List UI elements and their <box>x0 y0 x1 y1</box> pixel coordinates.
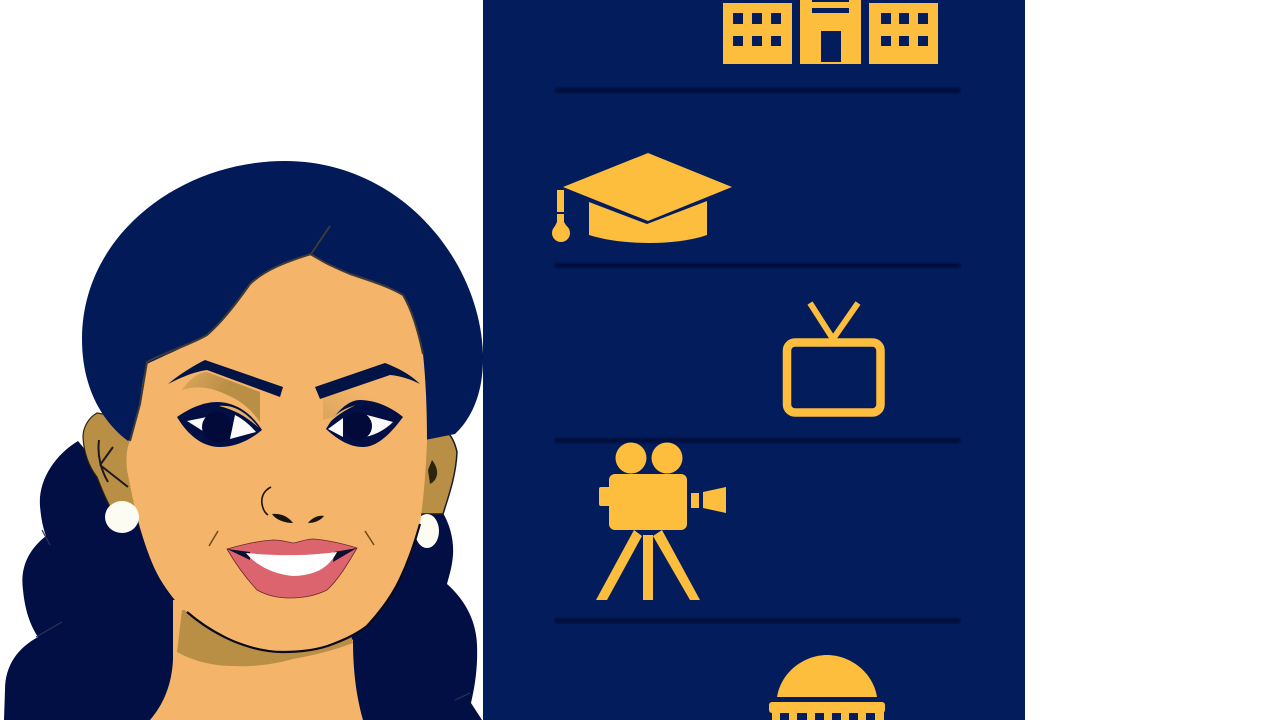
panel: navy icon column <box>483 0 1025 720</box>
mouth corners <box>227 548 357 562</box>
face <box>126 255 427 652</box>
lips <box>227 539 357 598</box>
right eye shadow <box>323 376 395 420</box>
ear details <box>98 440 128 487</box>
left earring <box>105 501 139 533</box>
hairline shading <box>130 226 423 441</box>
left eye shadow <box>182 372 260 422</box>
icon: movie camera on tripod <box>596 442 726 600</box>
left eye <box>177 402 262 447</box>
left ear <box>83 413 145 512</box>
icon: domed capitol building <box>769 655 885 720</box>
icon: graduation cap <box>552 153 732 243</box>
right ear <box>420 428 457 514</box>
nose <box>262 487 271 515</box>
icon: television <box>787 303 880 412</box>
neck <box>150 600 363 720</box>
back hair: right braid <box>330 500 482 720</box>
neck shadow <box>177 610 353 666</box>
illustration: smiling woman portrait <box>4 161 483 720</box>
braid strand lines <box>36 530 470 700</box>
cheek lines <box>209 531 374 546</box>
right eyebrow <box>315 363 420 399</box>
left eyebrow <box>168 360 283 397</box>
face outline <box>187 524 420 652</box>
back hair: left braid <box>4 441 200 720</box>
right earring <box>415 514 439 548</box>
right eye <box>326 400 403 447</box>
teeth <box>246 552 337 576</box>
icon: school building <box>723 0 938 64</box>
top hair <box>82 161 483 441</box>
